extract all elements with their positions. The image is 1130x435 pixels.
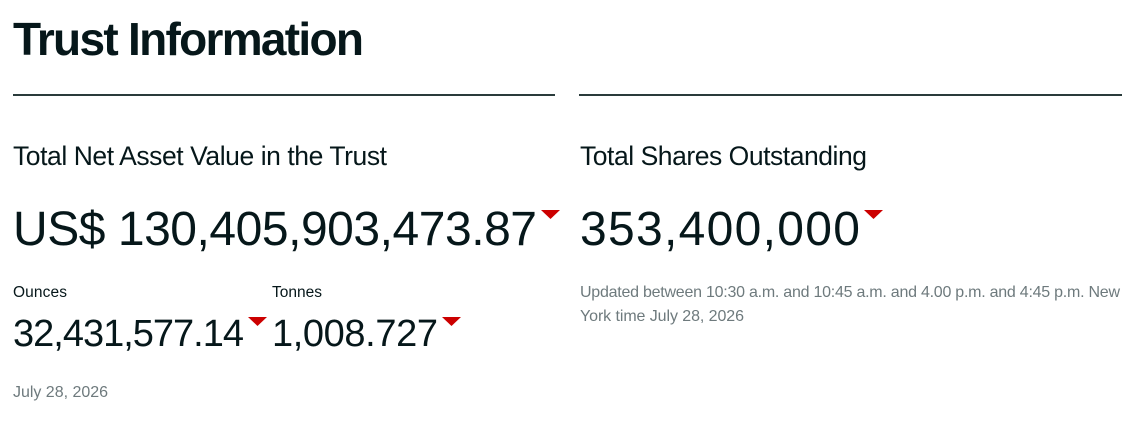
date note: July 28, 2026 bbox=[13, 384, 108, 401]
heading: total net asset value: Total Net Asset Value in the Trust bbox=[13, 141, 388, 171]
label: tonnes: Tonnes bbox=[272, 284, 322, 301]
icon: red down arrow, tonnes bbox=[442, 317, 461, 326]
update note: Updated between 10:30 a.m. and 10:45 a.m. and 4.00 p.m. and 4:45 p.m. New bbox=[580, 284, 1120, 301]
icon: red down arrow, ounces bbox=[248, 317, 267, 326]
update note bbox=[580, 284, 1120, 325]
label: ounces: Ounces bbox=[13, 284, 67, 301]
shares outstanding figure: 353,400,000 bbox=[580, 203, 860, 256]
title: Trust Information bbox=[13, 13, 364, 65]
icon: red down arrow, net asset value bbox=[541, 210, 560, 219]
heading: total shares outstanding: Total Shares Outstanding bbox=[580, 141, 867, 171]
net asset value figure: US$ 130,405,903,473.87 bbox=[13, 203, 537, 256]
ounces figure: 32,431,577.14 bbox=[13, 313, 244, 355]
update note: York time July 28, 2026 bbox=[580, 308, 744, 325]
icon: red down arrow, shares bbox=[864, 210, 883, 219]
panel: total shares outstanding bbox=[580, 141, 1120, 325]
tonnes figure: 1,008.727 bbox=[272, 313, 438, 355]
panel: total net asset value bbox=[13, 141, 560, 401]
